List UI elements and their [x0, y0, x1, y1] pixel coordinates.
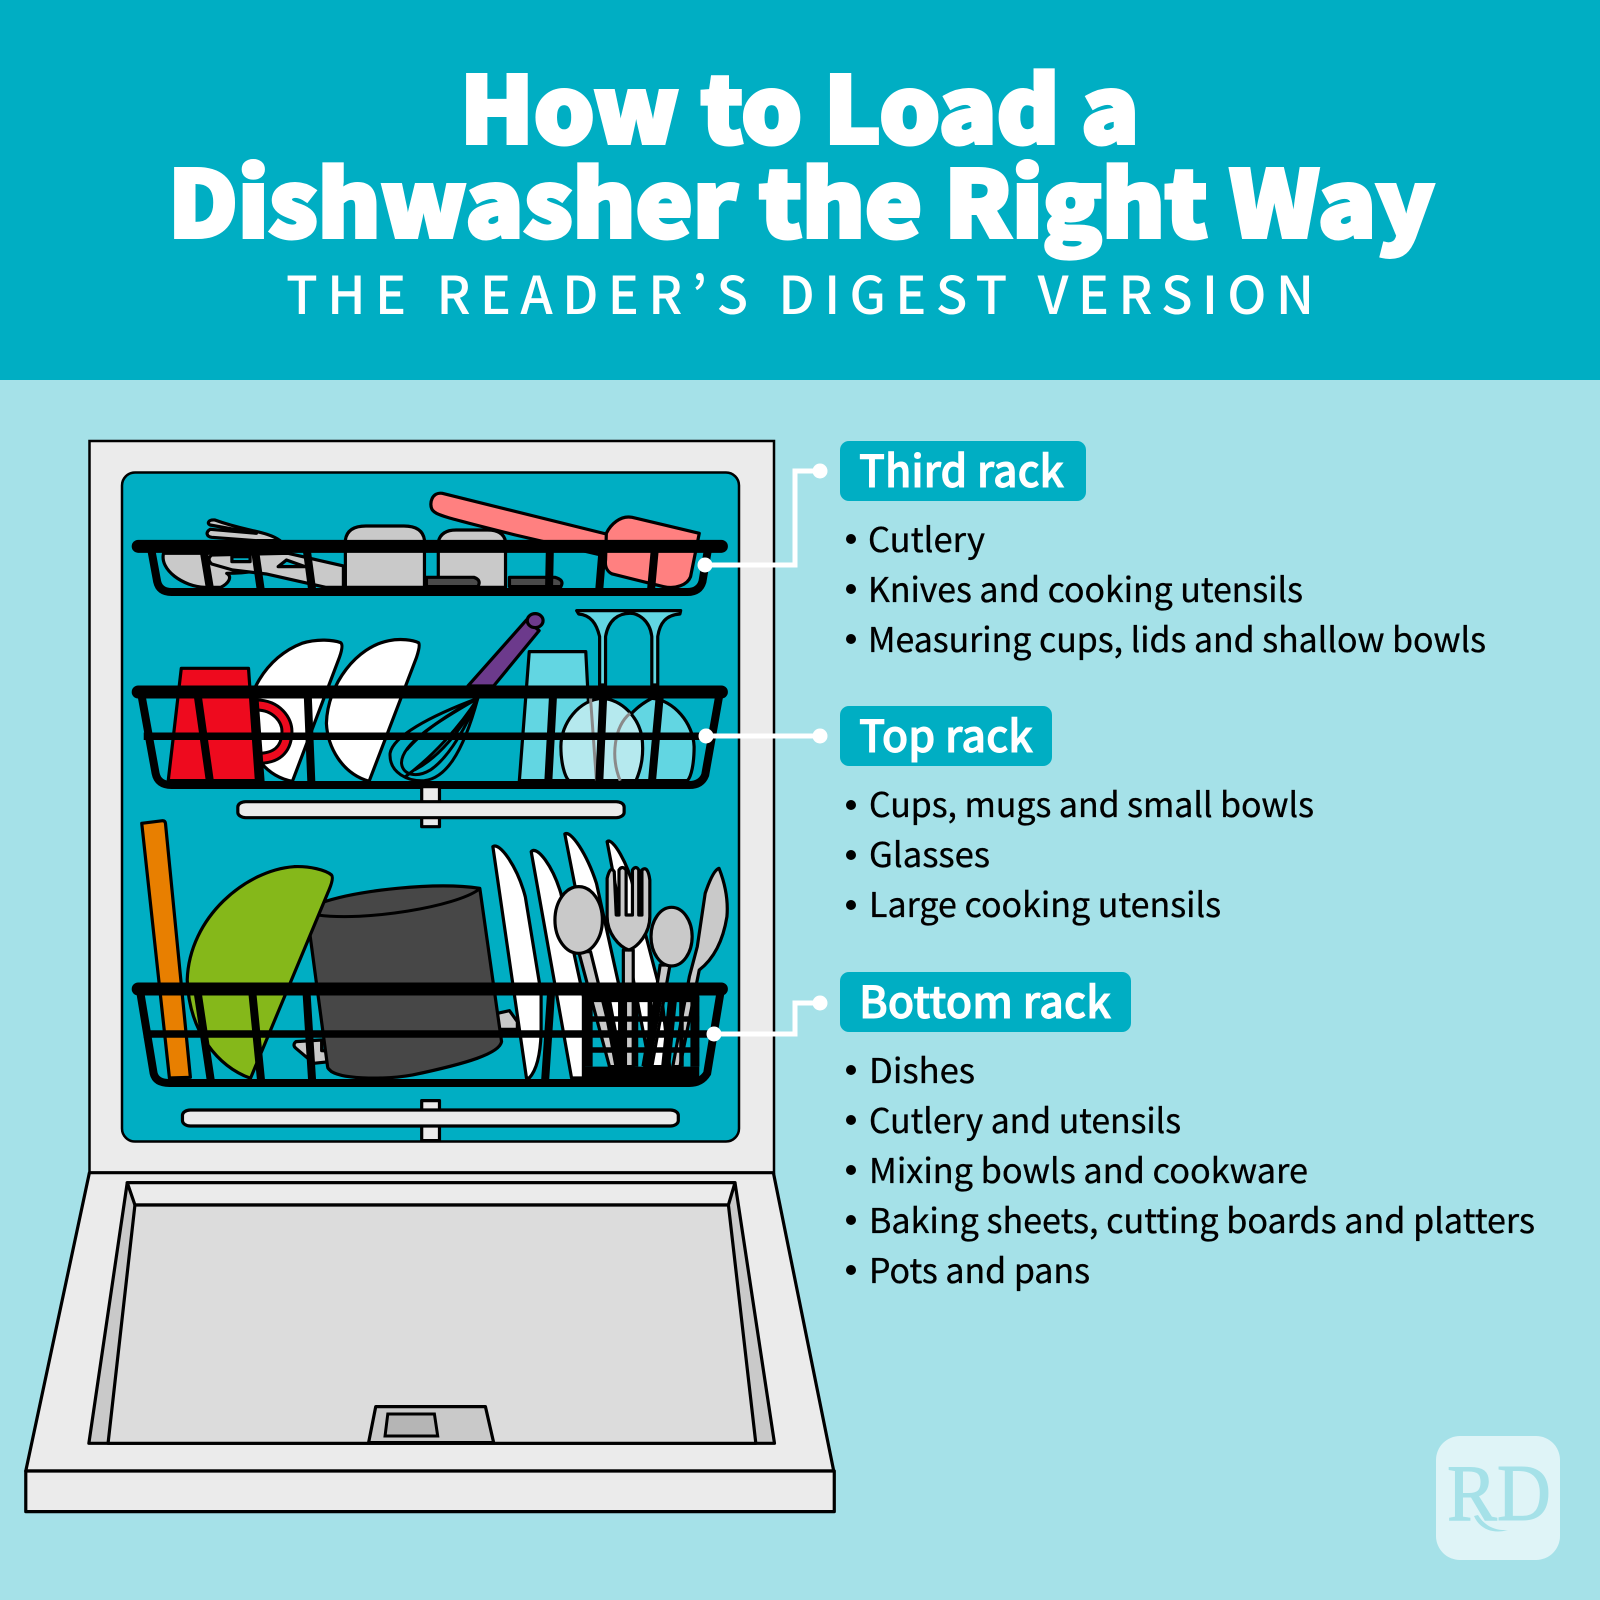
- label: top rack: Top rack: [859, 701, 1033, 765]
- list: bottom rack: Baking sheets, cutting boards and platters: [869, 1194, 1535, 1243]
- list: bottom rack: [846, 1044, 1535, 1293]
- cutlery basket: [583, 997, 699, 1083]
- dishwasher interior: [122, 472, 739, 1142]
- upper spray arm: [238, 787, 624, 827]
- bottom rack: [138, 821, 727, 1083]
- blue glass: [519, 652, 593, 781]
- label: third rack: Third rack: [859, 436, 1064, 500]
- list: top rack: Cups, mugs and small bowls: [869, 778, 1314, 827]
- orange cutting board: [142, 821, 190, 1078]
- dishwasher illustration: [26, 441, 834, 1512]
- measuring cups: [345, 526, 562, 587]
- whisk: [390, 614, 543, 781]
- pot: [294, 886, 517, 1078]
- fork: [207, 520, 343, 587]
- RD logo: RD: [1447, 1450, 1551, 1538]
- plates: [246, 640, 419, 781]
- door latch: [369, 1407, 494, 1443]
- spoon: [163, 553, 288, 587]
- list: third rack: [846, 513, 1486, 662]
- rack wires: [138, 546, 721, 592]
- label: bottom rack: Bottom rack: [859, 967, 1111, 1031]
- knives: [493, 834, 670, 1078]
- list: bottom rack: Pots and pans: [869, 1244, 1090, 1293]
- red mug: [168, 668, 287, 781]
- title: Dishwasher the Right Way: [168, 132, 1434, 264]
- wine glasses: [561, 611, 694, 781]
- callout connector: bottom rack: [706, 996, 828, 1042]
- list: bottom rack: Dishes: [869, 1044, 975, 1093]
- open door: [26, 1173, 834, 1512]
- list: third rack: Knives and cooking utensils: [868, 563, 1303, 612]
- spoons and fork: [555, 867, 727, 1067]
- list: bottom rack: Mixing bowls and cookware: [869, 1144, 1308, 1193]
- rack wires: [138, 692, 721, 785]
- spatula: [431, 493, 699, 587]
- header banner: [0, 0, 1600, 380]
- title: How to Load a: [460, 38, 1139, 170]
- callout connector: top rack: [698, 728, 828, 744]
- top rack: [138, 611, 721, 785]
- third rack: [138, 493, 721, 592]
- title: [168, 38, 1434, 264]
- RD logo: [1436, 1436, 1560, 1560]
- subtitle: THE READER’S DIGEST VERSION: [286, 254, 1314, 329]
- lower spray arm: [182, 1101, 678, 1141]
- callout connector: third rack: [698, 464, 828, 572]
- list: third rack: Measuring cups, lids and shallow bowls: [868, 613, 1486, 662]
- green plate: [187, 867, 332, 1078]
- list: top rack: Large cooking utensils: [869, 878, 1221, 927]
- dishwasher tub frame: [90, 441, 774, 1173]
- list: top rack: [846, 778, 1314, 927]
- list: top rack: Glasses: [869, 828, 990, 877]
- list: third rack: Cutlery: [868, 513, 985, 562]
- rack wires: [138, 989, 721, 1083]
- list: bottom rack: Cutlery and utensils: [869, 1094, 1181, 1143]
